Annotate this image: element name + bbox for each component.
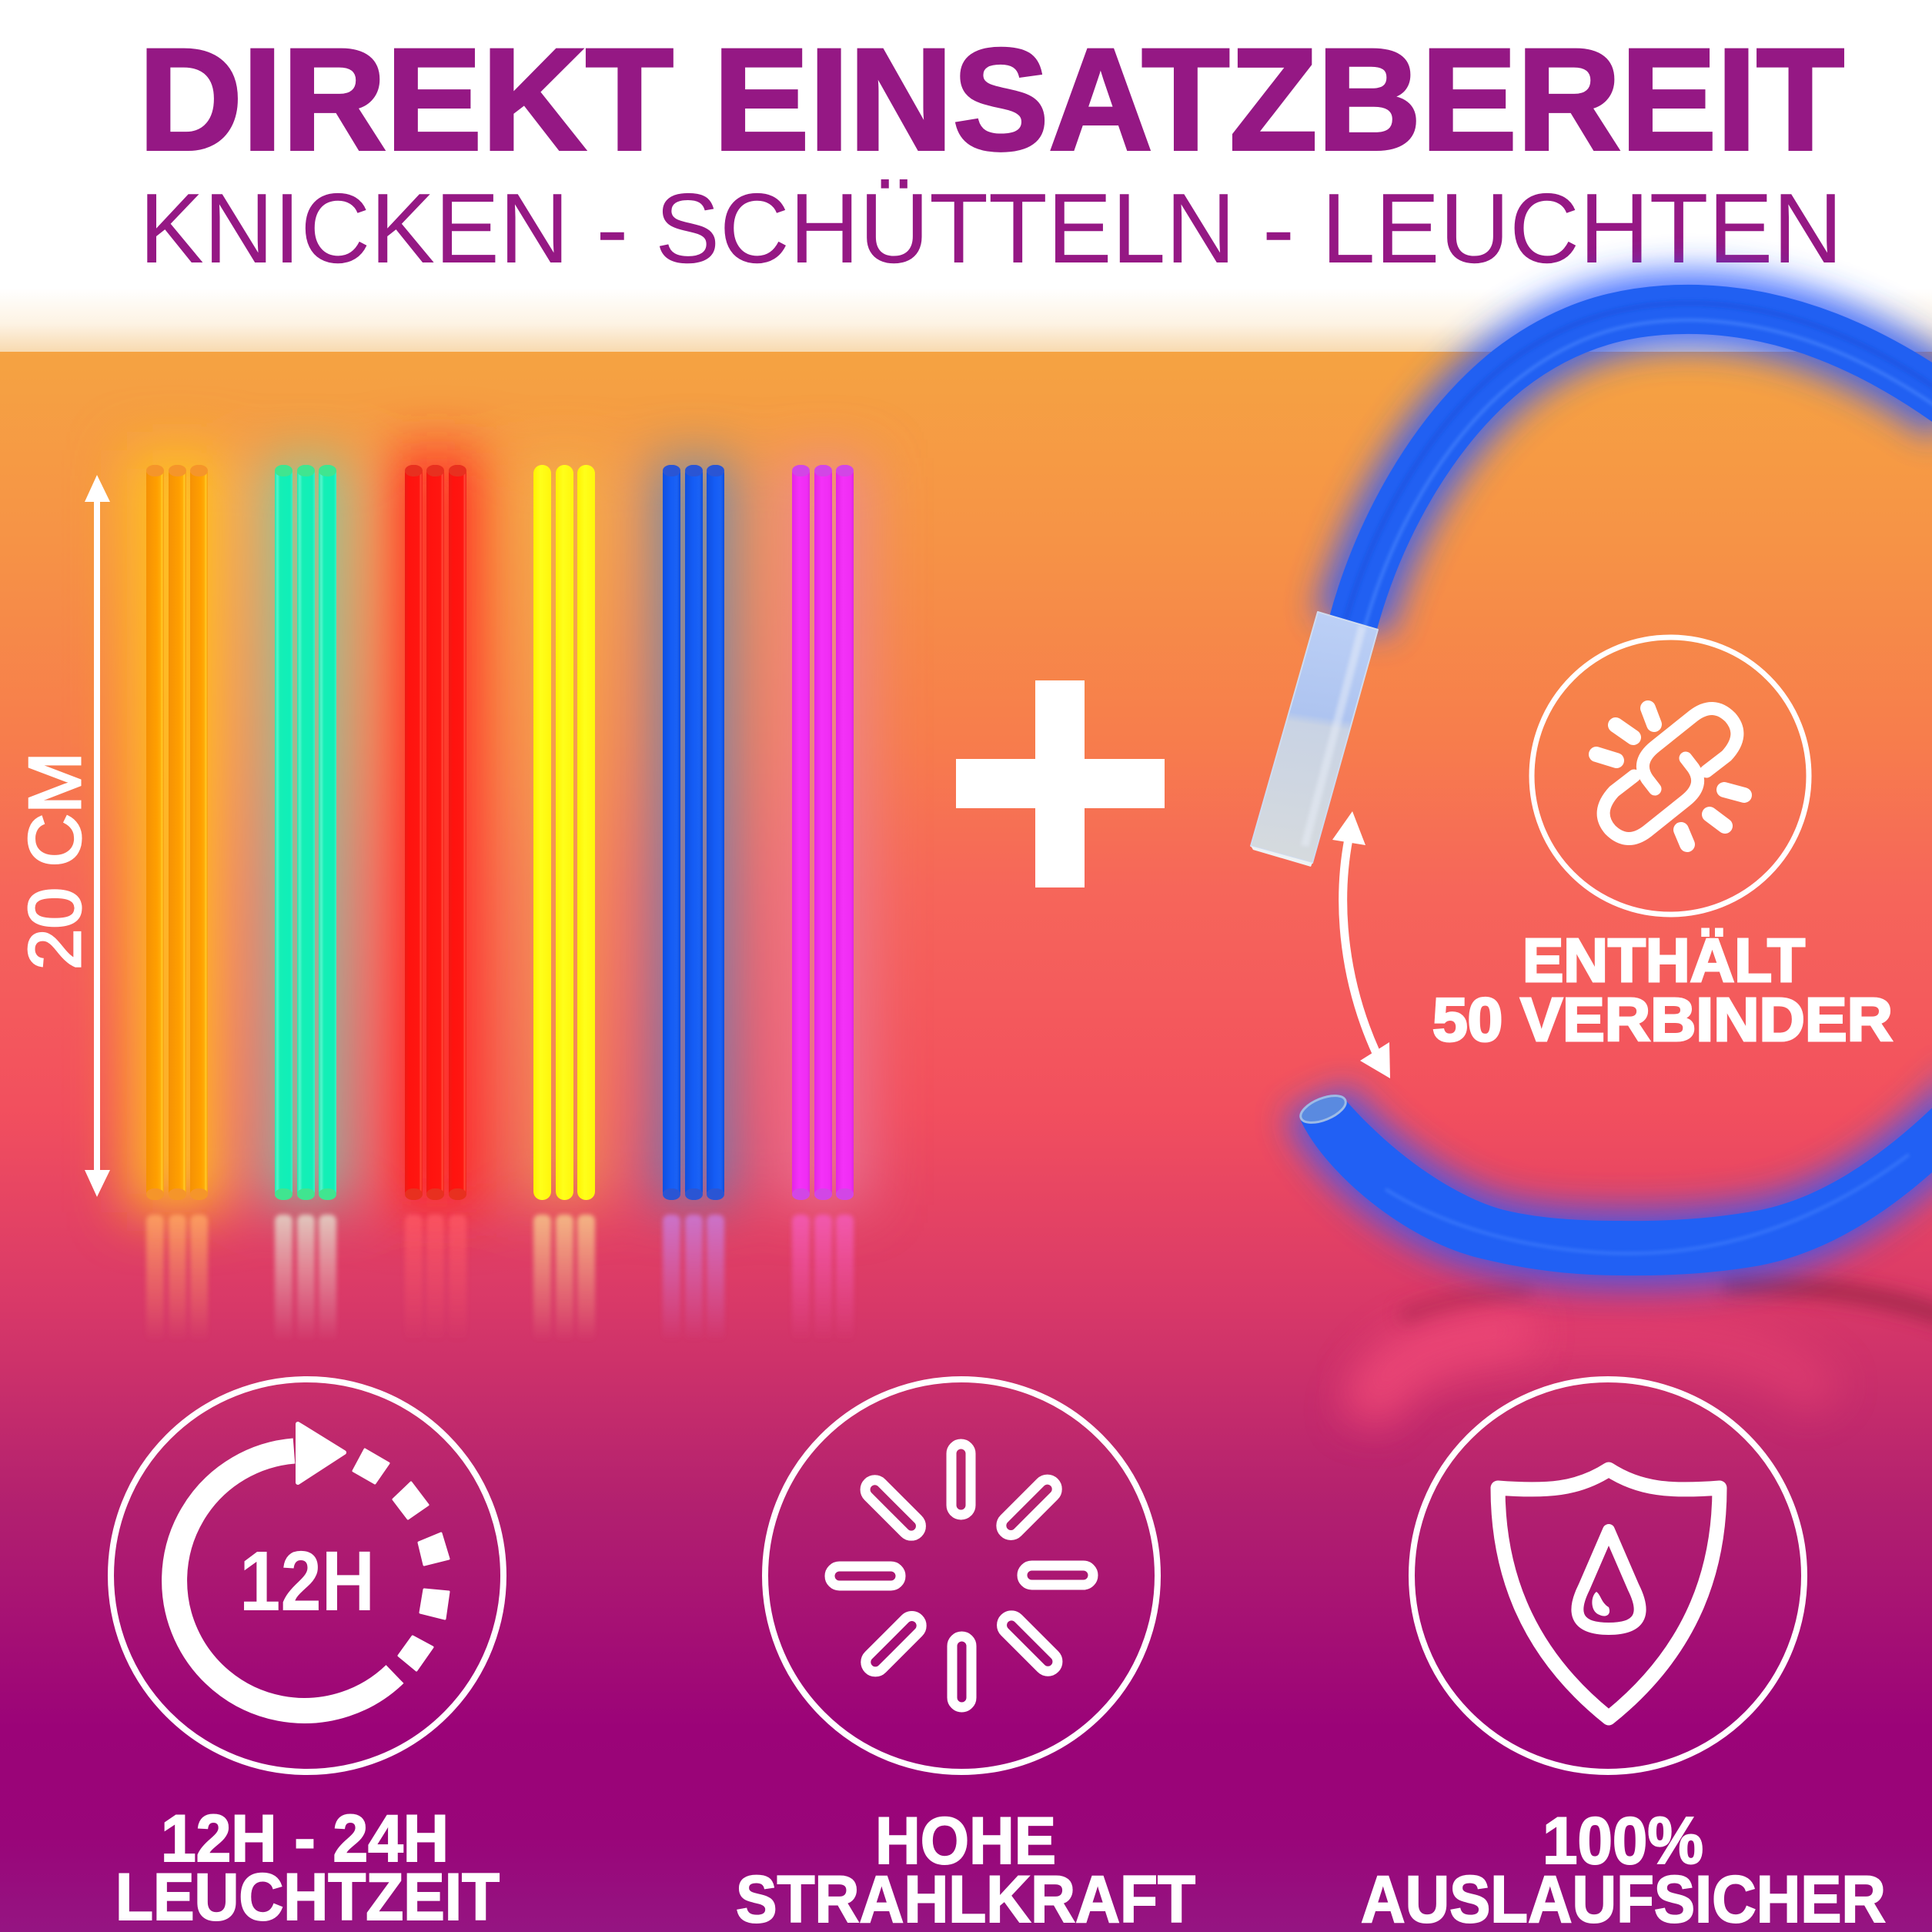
glow sticks panel	[127, 450, 870, 1342]
icon: connector link in circle	[1532, 637, 1809, 914]
text: Hohe Strahlkraft: HOHE	[875, 1804, 1056, 1878]
stick reflections	[146, 1215, 854, 1342]
teal sticks	[275, 465, 336, 1200]
rays	[1596, 708, 1744, 844]
clock dashes	[353, 1449, 449, 1670]
label: 20 CM: 20 CM	[14, 752, 96, 970]
connector sleeve	[1251, 612, 1378, 867]
floor shadow and reflection of the ring	[1362, 1284, 1932, 1424]
drop highlight	[1592, 1592, 1609, 1616]
text: 100% Auslaufsicher	[1361, 1804, 1886, 1932]
icon: plus sign	[956, 680, 1165, 887]
clock arrow head	[298, 1424, 344, 1482]
text: connector caption: ENTHÄLT	[1523, 926, 1805, 994]
magenta sticks	[792, 465, 854, 1200]
arrow: 20 cm dimension	[85, 475, 110, 1197]
arrow: curved double arrow between tube ends	[1332, 811, 1390, 1078]
icon: shield with drop circle	[1412, 1379, 1804, 1772]
red sticks	[405, 465, 466, 1200]
drop	[1577, 1530, 1640, 1629]
text: 100% Auslaufsicher: 100%	[1543, 1804, 1703, 1878]
header band	[0, 0, 1932, 352]
link chain	[1603, 708, 1737, 839]
orange sticks	[146, 465, 208, 1200]
icon: 12h clock circle	[111, 1379, 503, 1772]
subtitle: KNICKEN - SCHÜTTELN - LEUCHTEN	[139, 173, 1843, 284]
yellow sticks	[533, 465, 595, 1200]
text: 12H - 24H Leuchtzeit: 12H - 24H	[161, 1802, 449, 1876]
blue sticks	[663, 465, 724, 1200]
tube end cap	[1297, 1090, 1349, 1128]
clock arc	[175, 1451, 395, 1710]
clock value: 12H	[239, 1534, 375, 1629]
title: DIREKT EINSATZBEREIT	[139, 18, 1844, 180]
blue ring: lower tube	[1297, 1090, 1932, 1275]
blue ring: upper tube	[1345, 303, 1932, 630]
text: connector caption	[1432, 926, 1893, 1054]
glows behind the sticks	[127, 450, 870, 1212]
text: Hohe Strahlkraft	[736, 1804, 1195, 1932]
text: connector caption: 50 VERBINDER	[1432, 985, 1893, 1054]
shield	[1498, 1469, 1720, 1718]
text: 12H - 24H Leuchtzeit	[115, 1802, 500, 1932]
icon: brightness rays circle	[765, 1379, 1158, 1772]
pills	[830, 1444, 1093, 1707]
